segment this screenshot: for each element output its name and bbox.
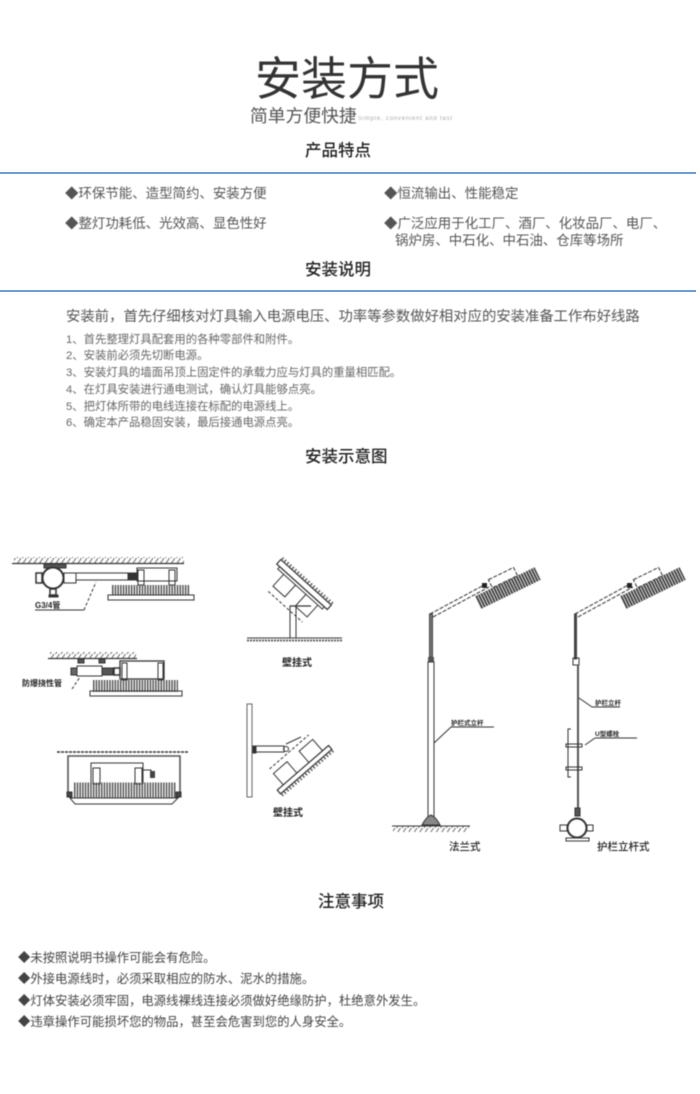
heading: product features: 产品特点 [305, 142, 371, 160]
precautions list [18, 950, 425, 1029]
title: 安装方式 [255, 53, 439, 105]
label: conduit: G3/4管 [35, 600, 60, 610]
heading: precautions: 注意事项 [318, 893, 384, 911]
installation steps [66, 332, 401, 429]
precaution 4: ◆违章操作可能损坏您的物品，甚至会危害到您的人身安全。 [18, 1015, 351, 1029]
feature 3: ◆整灯功耗低、光效高、显色性好 [65, 216, 267, 231]
step 2: 2、安装前必须先切断电源。 [66, 350, 208, 362]
label: guardrail pole: 护栏式立杆 [451, 718, 484, 727]
subtitle english: Simple, convenient and fast [358, 116, 453, 122]
step 5: 5、把灯体所带的电线连接在标配的电源线上。 [66, 401, 299, 413]
label: U bolt: U型螺栓 [595, 729, 620, 738]
diagram: ceiling conduit mount [12, 557, 194, 610]
step 4: 4、在灯具安装进行通电测试，确认灯具能够点亮。 [66, 384, 322, 396]
step 3: 3、安装灯具的墙面吊顶上固定件的承载力应与灯具的重量相匹配。 [66, 367, 401, 379]
diagram: post mount [247, 558, 342, 640]
step 1: 1、首先整理灯具配套用的各种零部件和附件。 [66, 334, 299, 346]
step 6: 6、确定本产品稳固安装，最后接通电源点亮。 [66, 417, 299, 429]
diagram: flange pole mount [392, 559, 538, 832]
precaution 1: ◆未按照说明书操作可能会有危险。 [18, 951, 216, 965]
diagram: flexible conduit ceiling mount [22, 652, 182, 696]
diagram: enclosed frame mount [57, 752, 188, 804]
feature 4 [384, 216, 666, 248]
heading: installation diagrams: 安装示意图 [305, 448, 388, 466]
feature 2: ◆恒流输出、性能稳定 [384, 186, 518, 201]
label: flange mount: 法兰式 [449, 840, 481, 853]
feature 4: ◆广泛应用于化工厂、酒厂、化妆品厂、电厂、 [384, 216, 666, 231]
label: wall mount: 壁挂式 [273, 806, 303, 819]
diagram: guardrail pole mount [560, 559, 683, 841]
intro paragraph: 安装前，首先仔细核对灯具输入电源电压、功率等参数做好相对应的安装准备工作布好线路 [66, 309, 640, 325]
feature 4: 锅炉房、中石化、中石油、仓库等场所 [395, 233, 623, 248]
label: guardrail pole: 护栏立杆 [595, 698, 622, 707]
label: post mount: 壁挂式 [282, 656, 312, 669]
label: flexible conduit: 防爆挠性管 [22, 678, 62, 688]
feature 1: ◆环保节能、造型简约、安装方便 [65, 186, 267, 201]
subtitle: 简单方便快捷 [250, 106, 357, 126]
precaution 2: ◆外接电源线时，必须采取相应的防水、泥水的措施。 [18, 972, 314, 986]
heading: installation notes: 安装说明 [305, 261, 371, 279]
diagram: wall mount [247, 704, 333, 797]
feature list [64, 186, 666, 248]
precaution 3: ◆灯体安装必须牢固，电源线裸线连接必须做好绝缘防护，杜绝意外发生。 [18, 994, 425, 1008]
label: guardrail pole mount: 护栏立杆式 [597, 840, 650, 853]
